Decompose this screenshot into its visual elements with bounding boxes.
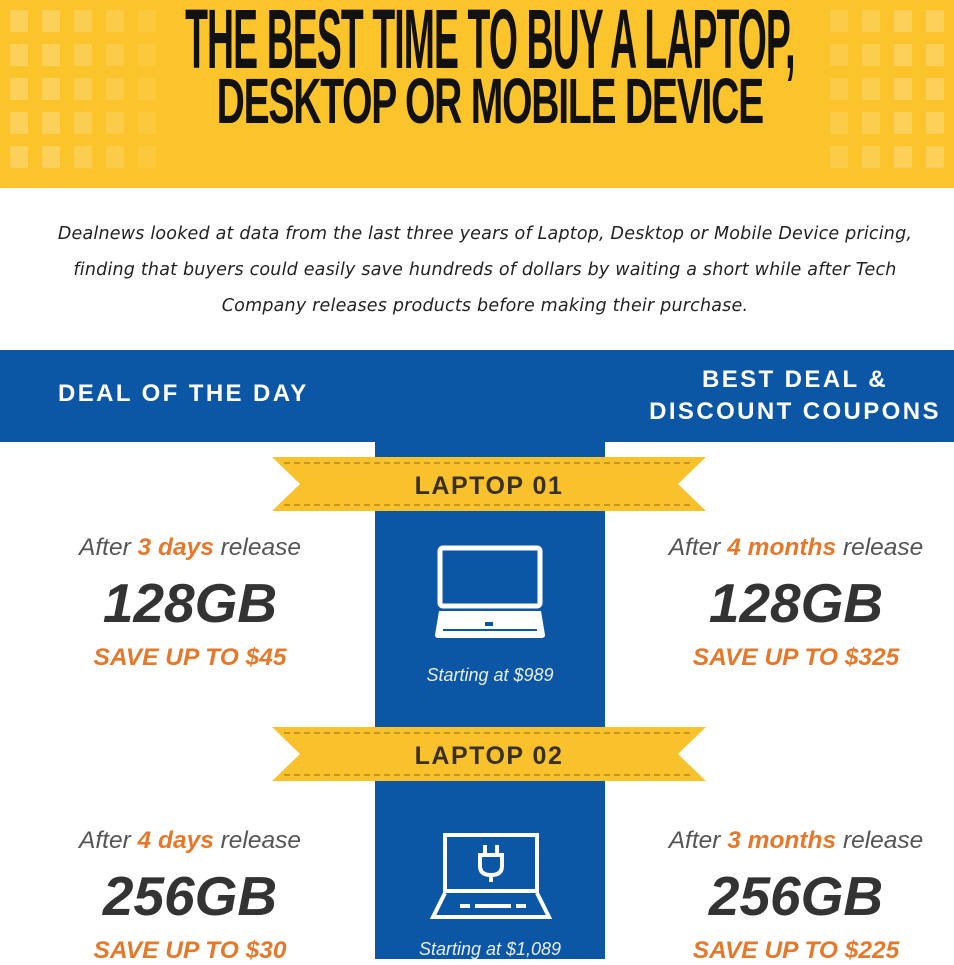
icon: laptop with plug <box>430 833 552 919</box>
heading: best deal & discount coupons <box>649 366 941 425</box>
ribbon: laptop 02 <box>272 727 706 781</box>
right: laptop 01 deal <box>668 534 923 671</box>
ribbon: laptop 02: LAPTOP 02 <box>415 742 563 770</box>
intro text: finding that buyers could easily save hundreds of dollars by waiting a short while after Tech <box>73 260 897 280</box>
blue header band <box>0 350 954 442</box>
price: laptop 01: Starting at $989 <box>426 665 554 685</box>
left: laptop 02 deal: SAVE UP TO $30 <box>94 937 286 964</box>
right: laptop 01 deal: 128GB <box>709 572 883 634</box>
right: laptop 02 deal <box>668 827 923 964</box>
right: laptop 02 deal: After 3 months release <box>669 827 923 854</box>
title <box>185 0 795 137</box>
left: laptop 01 deal: 128GB <box>103 572 277 634</box>
intro text: Dealnews looked at data from the last three years of Laptop, Desktop or Mobile Device pricing, <box>58 224 912 244</box>
heading: best deal & discount coupons: DISCOUNT COUPONS <box>649 398 941 425</box>
ribbon: laptop 01 <box>272 457 706 511</box>
left: laptop 01 deal <box>78 534 301 671</box>
price: laptop 02: Starting at $1,089 <box>419 939 561 959</box>
title: DESKTOP OR MOBILE DEVICE <box>217 65 763 137</box>
heading: best deal & discount coupons: BEST DEAL & <box>702 366 888 393</box>
left: laptop 02 deal <box>78 827 301 964</box>
ribbon: laptop 01: LAPTOP 01 <box>415 472 563 500</box>
left: laptop 02 deal: 256GB <box>103 865 277 927</box>
header banner <box>0 0 954 188</box>
icon: laptop <box>435 546 545 638</box>
right: laptop 01 deal: After 4 months release <box>669 534 923 561</box>
right: laptop 01 deal: SAVE UP TO $325 <box>693 644 899 671</box>
left: laptop 01 deal: After 3 days release <box>79 534 301 561</box>
left: laptop 01 deal: SAVE UP TO $45 <box>94 644 286 671</box>
left: laptop 02 deal: After 4 days release <box>79 827 301 854</box>
intro text: Company releases products before making their purchase. <box>222 296 748 316</box>
center blue column <box>375 442 605 959</box>
right: laptop 02 deal: 256GB <box>709 865 883 927</box>
right: laptop 02 deal: SAVE UP TO $225 <box>693 937 899 964</box>
intro text <box>58 224 912 316</box>
heading: deal of the day: DEAL OF THE DAY <box>58 380 309 407</box>
